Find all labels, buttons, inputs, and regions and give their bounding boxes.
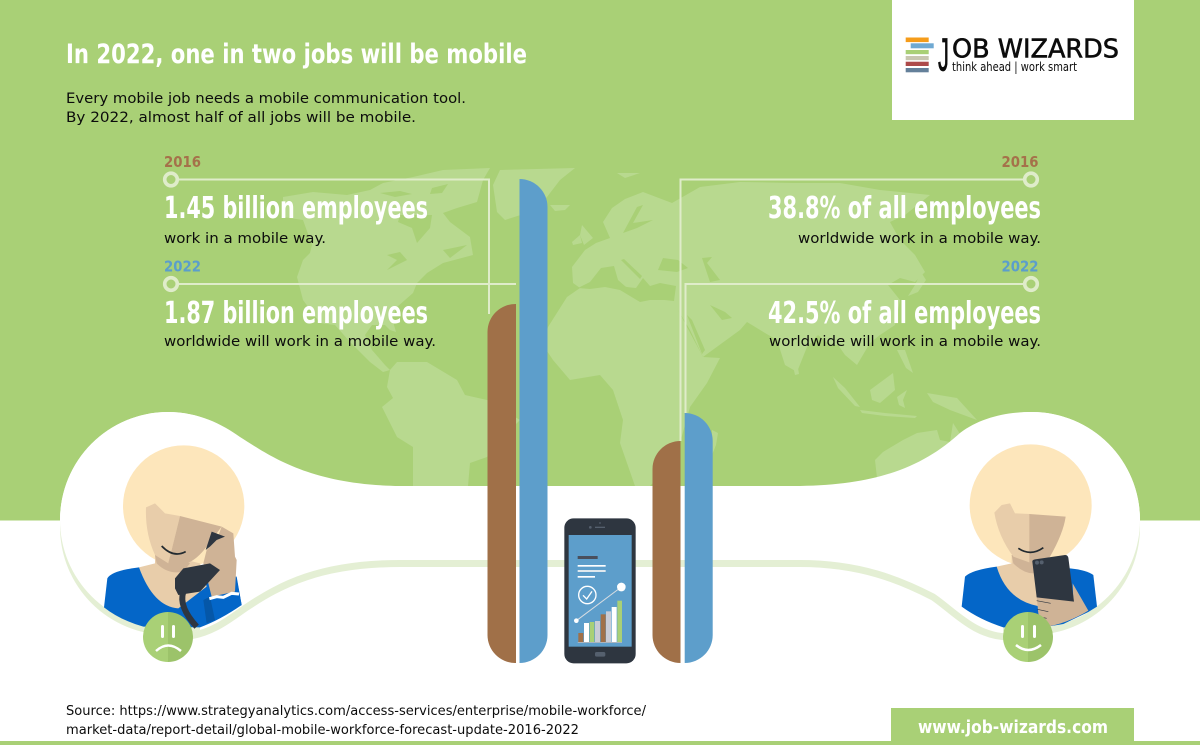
logo	[892, 0, 1134, 120]
right stat block: percentages	[768, 153, 1041, 350]
logo: OB WIZARDS	[952, 34, 1119, 64]
logo: J	[938, 28, 949, 80]
right stat block: percentages: worldwide will work in a mobile way.	[769, 334, 1041, 350]
person with smartphone	[962, 444, 1097, 627]
right stat block: percentages: worldwide work in a mobile way.	[798, 231, 1041, 247]
right stat block: percentages: 2016	[1002, 153, 1038, 171]
source text: market-data/report-detail/global-mobile-workforce-forecast-update-2016-2022	[66, 722, 579, 738]
white lower area with head circles	[0, 412, 1200, 745]
left stat block: employees: worldwide will work in a mobile way.	[164, 334, 436, 350]
person with desk phone	[104, 445, 244, 627]
website footer box	[891, 708, 1134, 745]
connector lines	[165, 173, 1037, 441]
intro text	[66, 91, 466, 126]
left stat block: employees	[164, 153, 436, 350]
connecting curve	[60, 412, 1140, 637]
left stat block: employees: 2022	[164, 258, 201, 276]
sad face icon	[143, 612, 193, 662]
right stat block: percentages: 38.8% of all employees	[768, 191, 1041, 226]
left stat block: employees: 2016	[164, 153, 201, 171]
title: In 2022, one in two jobs will be mobile	[66, 39, 527, 70]
right stat block: percentages: 2022	[1002, 258, 1038, 276]
intro text: By 2022, almost half of all jobs will be mobile.	[66, 110, 416, 126]
left stat block: employees: 1.87 billion employees	[164, 296, 428, 331]
source text	[66, 703, 646, 738]
website footer box: www.job-wizards.com	[918, 717, 1108, 738]
logo: think ahead | work smart	[952, 60, 1077, 74]
icon: smartphone	[564, 518, 636, 663]
bar chart: employees	[488, 179, 548, 663]
bar chart: percentages	[652, 413, 713, 663]
bottom strip	[0, 741, 1200, 745]
world map	[283, 168, 977, 486]
happy face icon	[1003, 612, 1053, 662]
left stat block: employees: work in a mobile way.	[164, 231, 326, 247]
seas on the map	[380, 184, 732, 354]
right stat block: percentages: 42.5% of all employees	[768, 296, 1041, 331]
left stat block: employees: 1.45 billion employees	[164, 191, 428, 226]
intro text: Every mobile job needs a mobile communication tool.	[66, 91, 466, 107]
source text: Source: https://www.strategyanalytics.com/access-services/enterprise/mobile-workforce/	[66, 703, 646, 719]
